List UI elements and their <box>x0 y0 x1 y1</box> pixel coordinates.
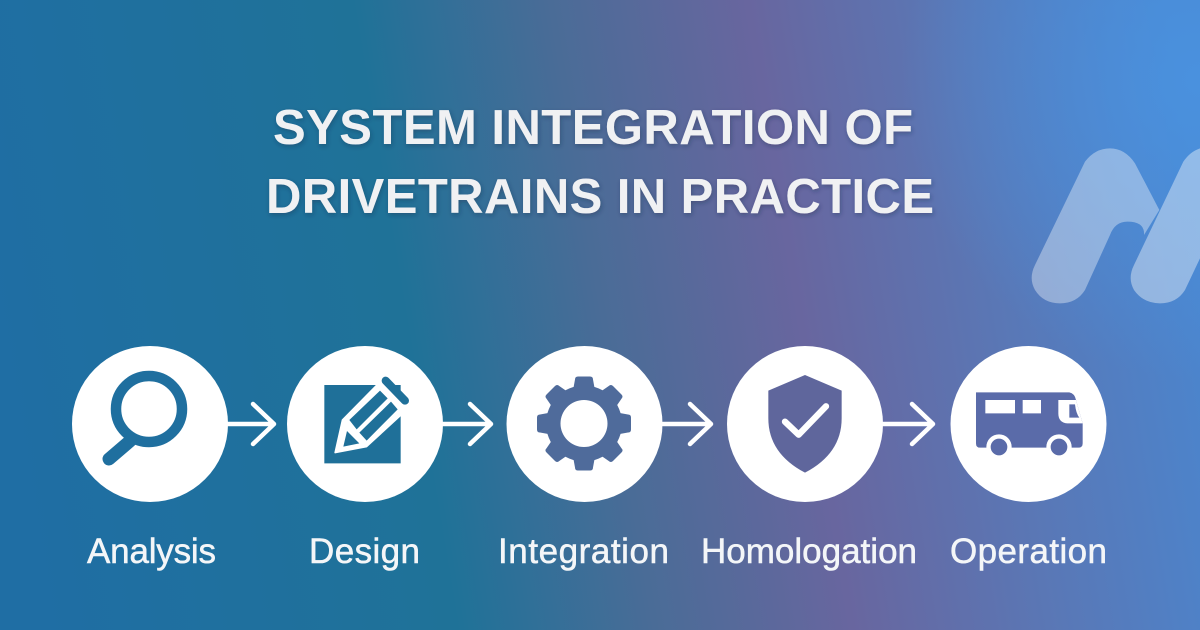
step: Homologation <box>701 346 917 571</box>
title: SYSTEM INTEGRATION OF <box>273 101 913 155</box>
title: DRIVETRAINS IN PRACTICE <box>266 170 934 224</box>
icon: pencil on square <box>324 381 408 463</box>
arrow 1 <box>227 404 274 444</box>
title <box>266 101 934 224</box>
step: Integration <box>498 346 669 571</box>
integration circle <box>506 346 662 502</box>
arrow 4 <box>883 404 933 444</box>
label: Integration: Integration <box>498 532 669 571</box>
step: Analysis <box>72 346 228 571</box>
label: Operation: Operation <box>950 532 1107 571</box>
label: Design: Design <box>309 532 420 571</box>
arrow 2 <box>443 404 491 444</box>
icon: gear <box>537 376 631 470</box>
label: Homologation: Homologation <box>701 532 917 571</box>
design circle <box>287 346 443 502</box>
label: Analysis: Analysis <box>87 532 216 571</box>
icon: shield with check <box>768 375 842 473</box>
arrow 3 <box>663 404 711 444</box>
logo mark watermark <box>1032 148 1200 303</box>
analysis circle <box>72 346 228 502</box>
operation circle <box>950 346 1106 502</box>
icon: magnifying glass <box>109 376 182 459</box>
icon: camper bus <box>976 392 1083 460</box>
step: Design <box>287 346 443 571</box>
step: Operation <box>950 346 1107 571</box>
homologation circle <box>727 346 883 502</box>
